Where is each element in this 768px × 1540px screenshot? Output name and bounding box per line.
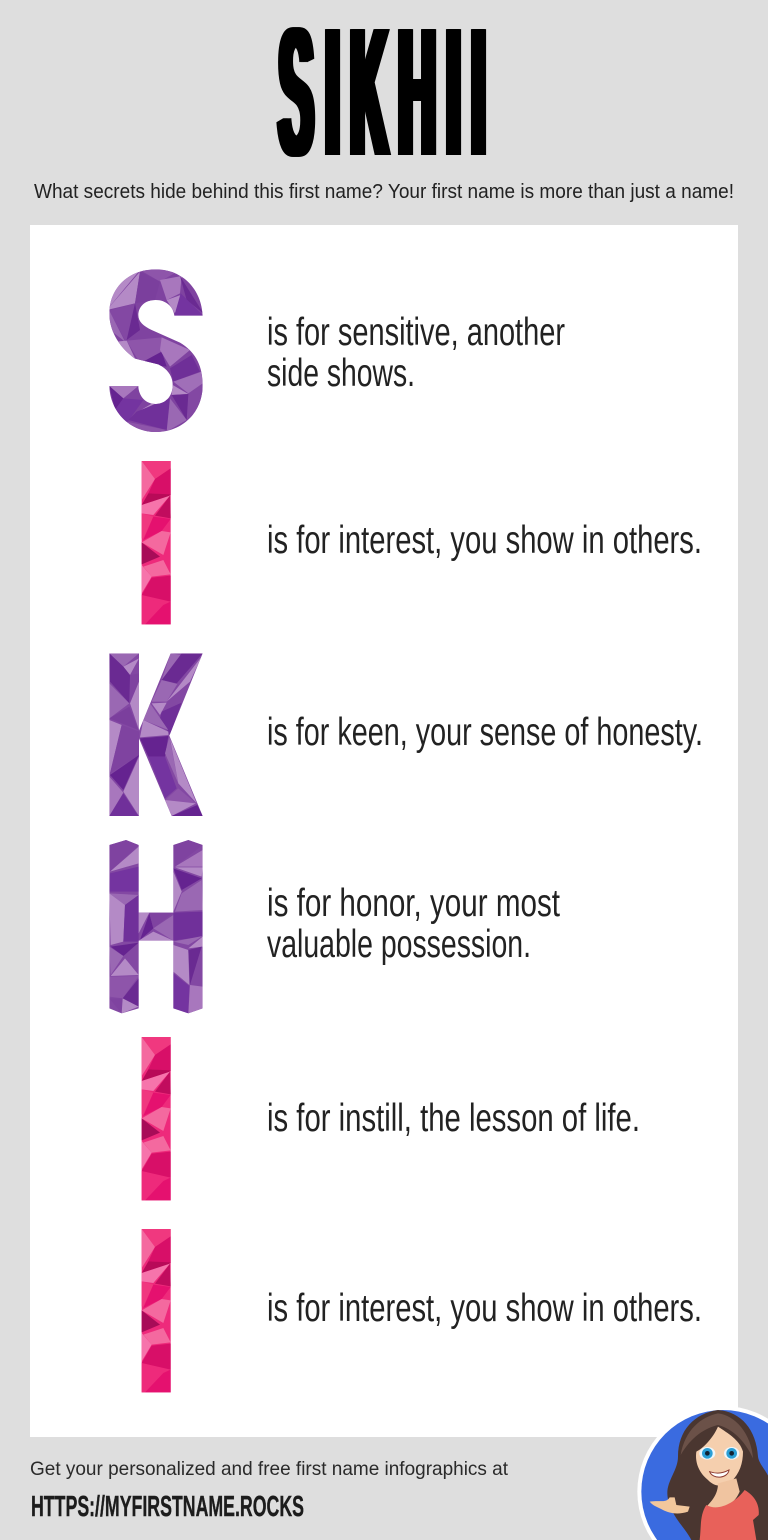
hair — [667, 1410, 768, 1540]
panel: white letter list — [30, 225, 738, 1437]
letter S — [107, 267, 207, 433]
hair highlight — [681, 1413, 753, 1458]
title — [275, 0, 486, 194]
mouth — [710, 1470, 729, 1477]
text: H line: valuable possession. — [267, 923, 531, 966]
footer call to action: Get your personalized and free first name infographics at — [30, 1458, 509, 1480]
face — [696, 1427, 743, 1486]
text: H line: is for honor, your most — [267, 882, 560, 925]
neck and chest — [706, 1478, 740, 1509]
letter K — [109, 653, 202, 816]
footer url: HTTPS://MYFIRSTNAME.ROCKS — [31, 1491, 304, 1523]
text: S line: is for sensitive, another — [267, 311, 565, 354]
letter I (first) — [142, 461, 171, 624]
hand — [650, 1497, 690, 1513]
text: second I line: is for instill, the lesson of life. — [267, 1097, 640, 1140]
text: S line — [267, 311, 565, 395]
text: S line: side shows. — [267, 352, 415, 395]
letter I (second) — [142, 1037, 171, 1200]
subtitle: What secrets hide behind this first name? Your first name is more than just a name! — [34, 181, 734, 203]
letter I (third) — [142, 1229, 171, 1392]
text: H line — [267, 882, 560, 966]
shirt — [700, 1490, 759, 1540]
letter H — [107, 838, 207, 1015]
eyes — [699, 1447, 715, 1460]
icon: avatar — [637, 1406, 768, 1540]
